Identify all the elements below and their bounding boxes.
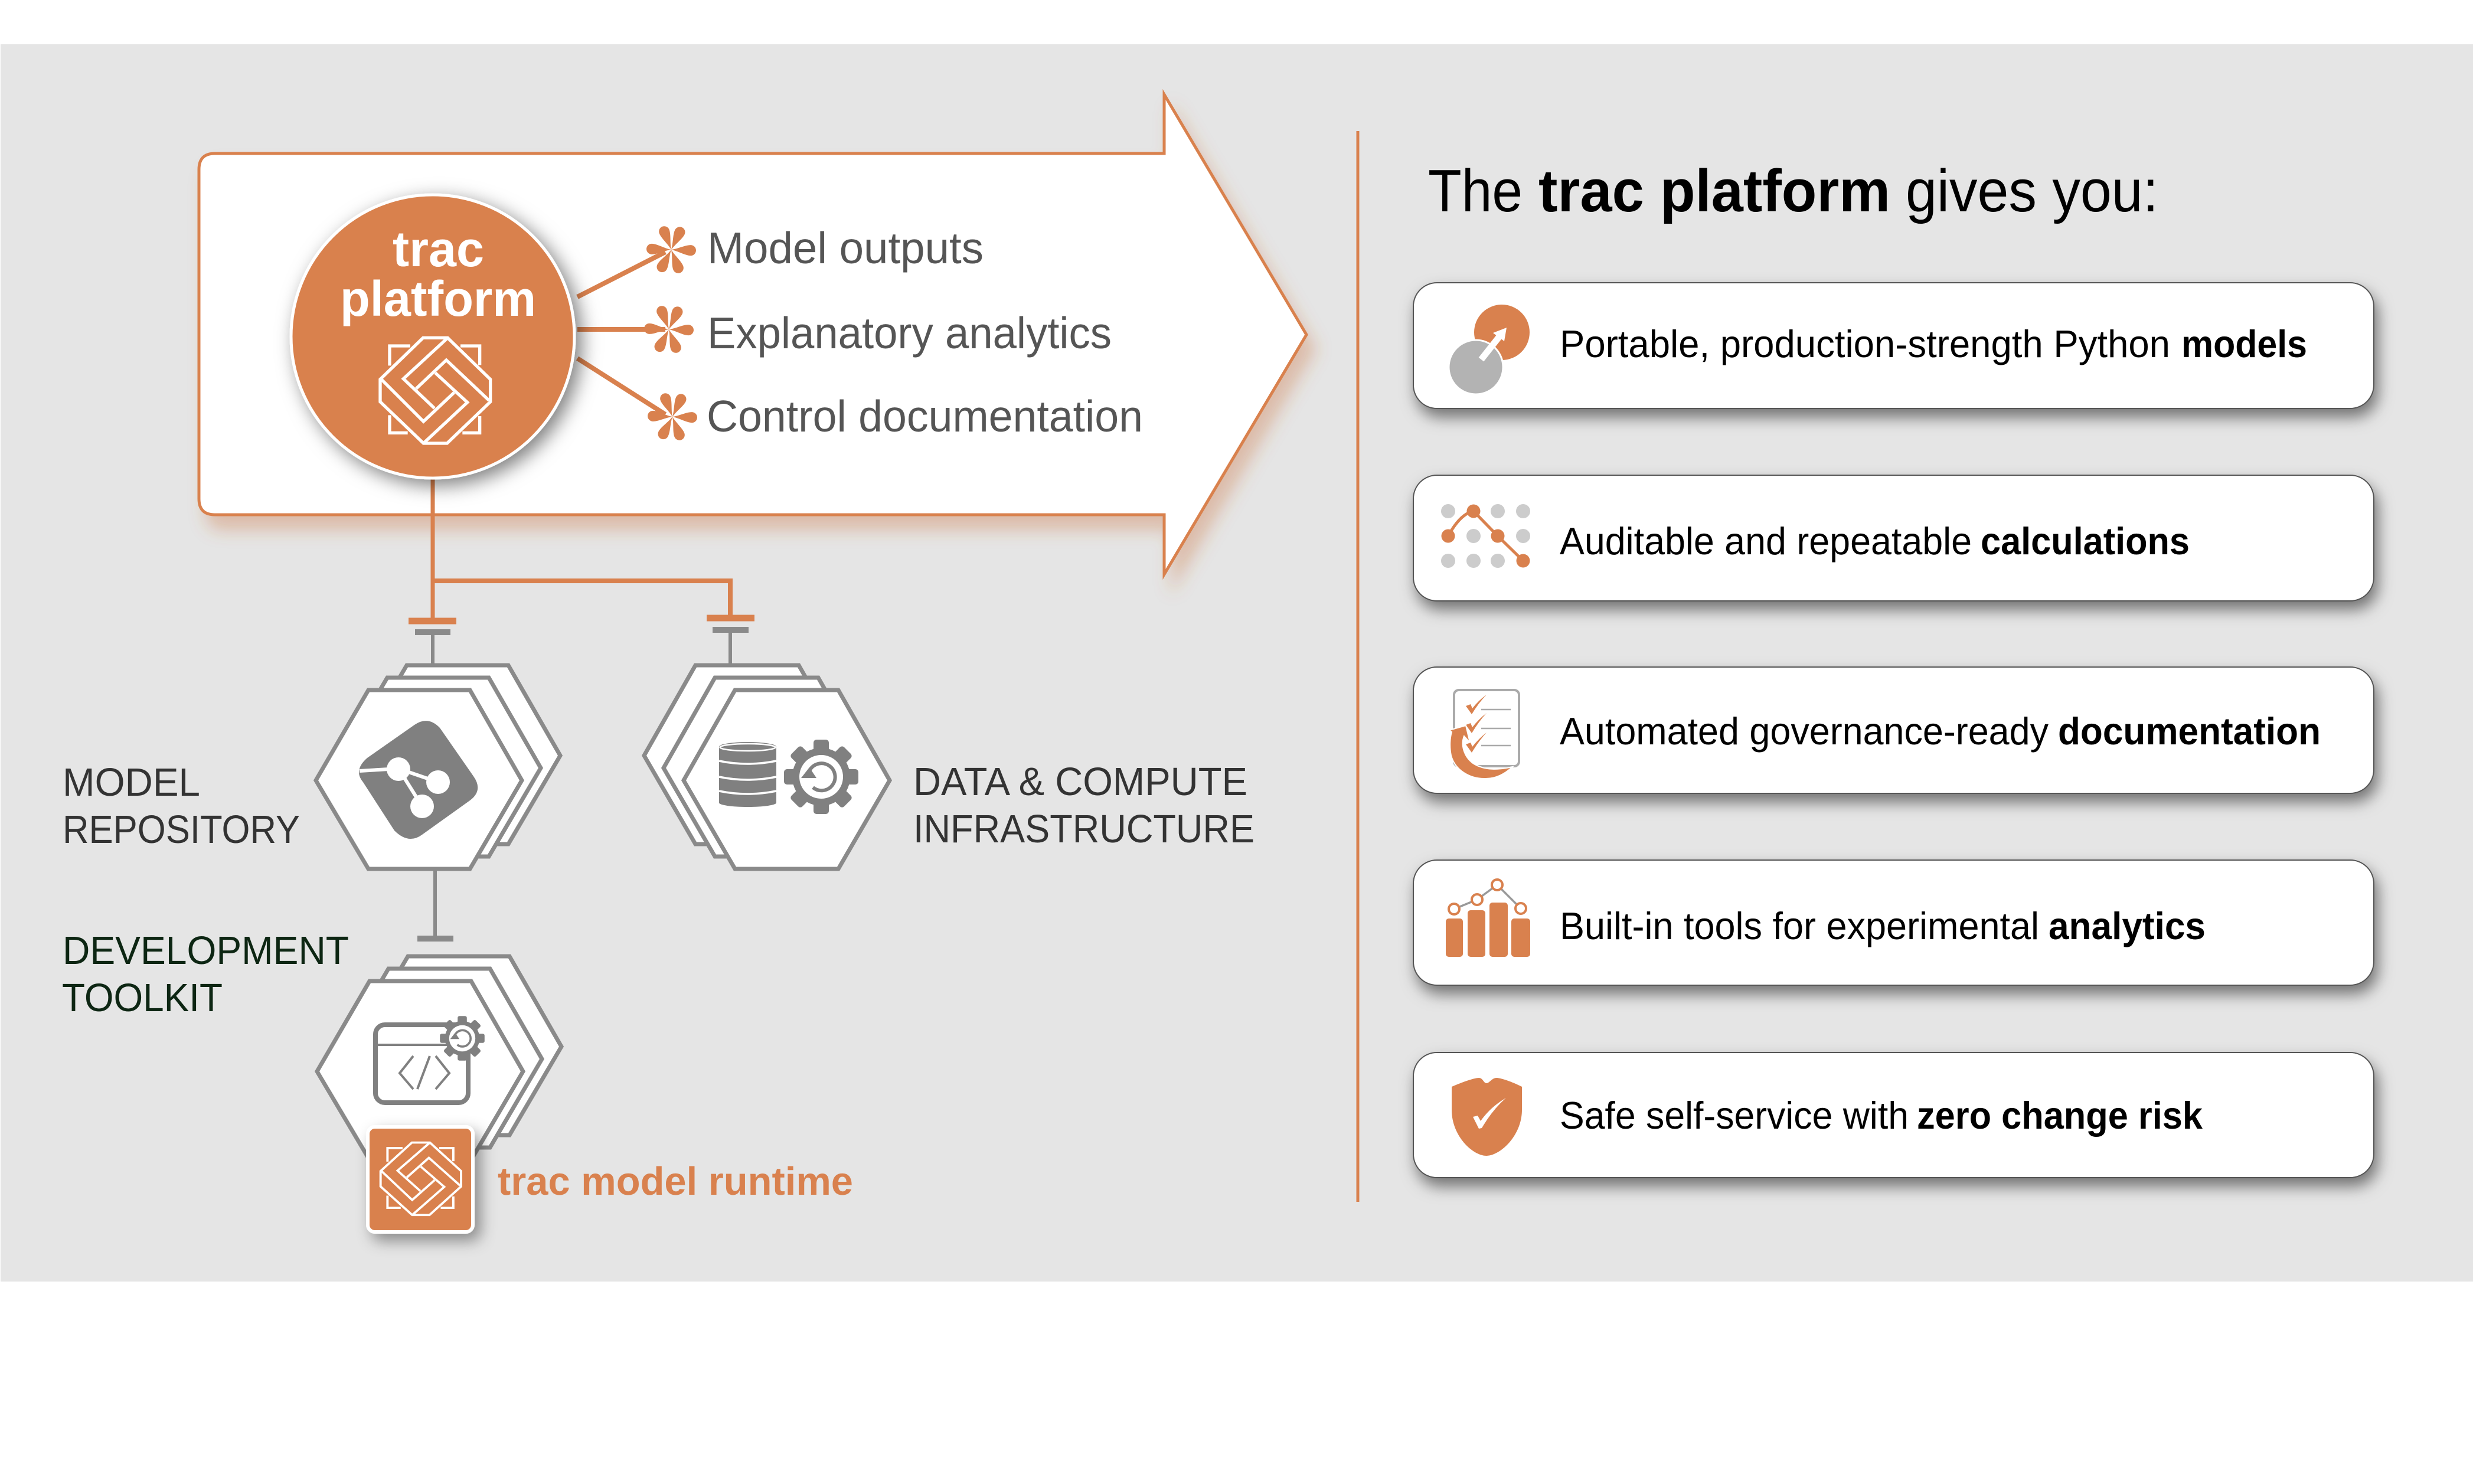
title <box>1428 158 2158 224</box>
text: analytics: analytics <box>2049 904 2206 947</box>
divider <box>1357 131 1359 1202</box>
card: documentation <box>1413 667 2374 793</box>
connectors: outputs <box>577 252 665 414</box>
text: portable models: models <box>2181 322 2307 365</box>
card: zero change risk <box>1413 1052 2374 1178</box>
text: portable models: Portable, production-strength Python <box>1560 322 2170 365</box>
label: model repository: REPOSITORY <box>63 808 300 852</box>
panel: trac platform arrow <box>199 94 1306 574</box>
text: calculations: calculations <box>1981 519 2190 563</box>
text: calculations <box>1560 519 2190 563</box>
text: analytics: Built-in tools for experimental <box>1560 904 2039 947</box>
title: gives you: <box>1906 158 2158 224</box>
trac platform circle <box>291 195 574 478</box>
text: zero change risk: Safe self-service with <box>1560 1094 1909 1137</box>
label: data and compute infrastructure <box>913 760 1255 851</box>
connectors: platform to infrastructure <box>409 479 754 621</box>
text: zero change risk <box>1560 1094 2203 1137</box>
title: trac platform <box>1538 158 1890 224</box>
text: calculations: Auditable and repeatable <box>1560 519 1972 563</box>
title: The <box>1428 158 1523 224</box>
text: zero change risk: zero change risk <box>1917 1094 2203 1137</box>
icon: gear <box>784 740 858 814</box>
icon: shield <box>1452 1078 1522 1156</box>
card: analytics <box>1413 860 2374 985</box>
label: data and compute infrastructure: DATA & COMPUTE <box>913 760 1247 804</box>
icon: bar chart <box>1446 880 1530 957</box>
label: development toolkit <box>62 929 349 1020</box>
text: documentation <box>1560 710 2321 753</box>
output: Control documentation: Control documentation <box>707 391 1143 441</box>
label: trac model runtime: trac model runtime <box>498 1159 853 1204</box>
icon: trac logo <box>380 338 491 443</box>
output: Explanatory analytics: Explanatory analytics <box>707 308 1112 358</box>
connector: repository to toolkit <box>417 870 453 939</box>
icon: git <box>359 721 478 839</box>
text: documentation: Automated governance-ready <box>1560 710 2049 753</box>
label: model repository: MODEL <box>63 760 200 805</box>
connector: infrastructure stem <box>713 630 749 666</box>
heading: trac: trac <box>393 221 484 277</box>
card: calculations <box>1413 475 2374 601</box>
label: data and compute infrastructure: INFRASTRUCTURE <box>913 807 1255 851</box>
label: model repository <box>63 760 300 852</box>
text: documentation: documentation <box>2058 710 2321 753</box>
icon: code window <box>375 1016 485 1103</box>
card: portable models <box>1413 283 2374 408</box>
icon: portable circles <box>1449 305 1530 394</box>
label: development toolkit: DEVELOPMENT <box>63 929 349 973</box>
connector: repository stem <box>415 632 450 666</box>
output: Model outputs: Model outputs <box>707 223 984 273</box>
icon: database <box>719 742 776 807</box>
trac model runtime badge <box>368 1127 473 1232</box>
hexagon stack: development toolkit <box>317 956 561 1160</box>
icon: dot plot <box>1441 504 1530 568</box>
hexagon stack: data and compute <box>644 665 890 869</box>
label: development toolkit: TOOLKIT <box>62 976 223 1020</box>
icon: checklist document <box>1449 690 1519 779</box>
heading: platform: platform <box>340 271 536 326</box>
hexagon stack: model repository <box>316 665 560 869</box>
